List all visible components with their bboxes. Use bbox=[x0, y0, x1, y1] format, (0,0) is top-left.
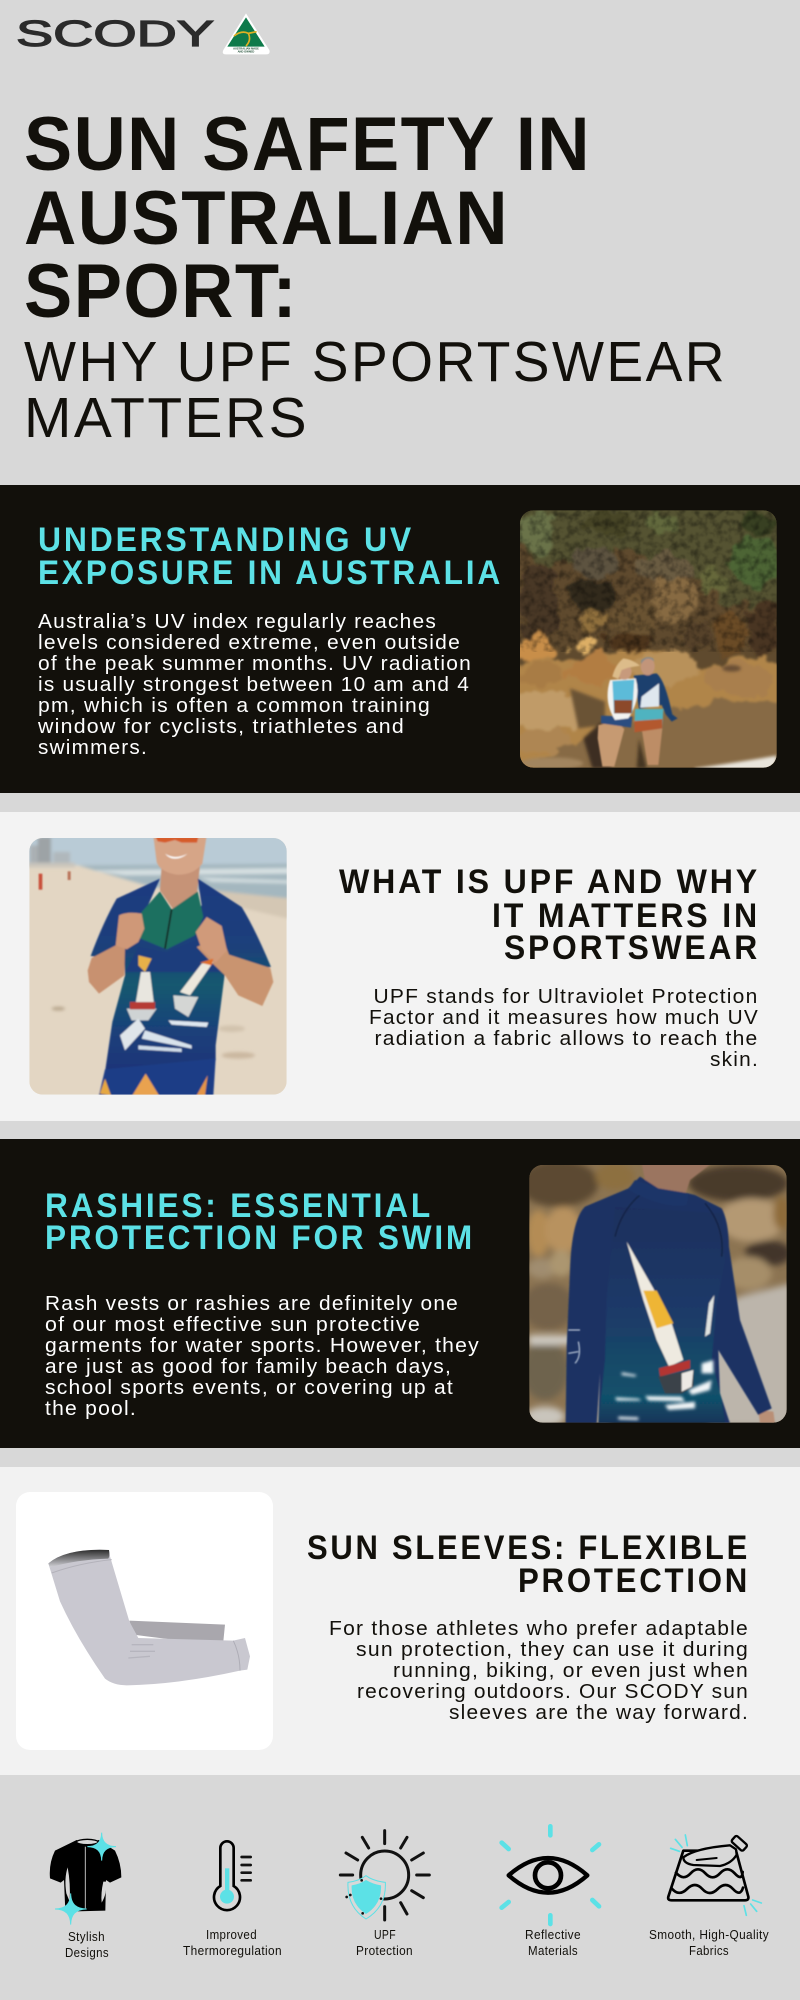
photo: navy rash vest bbox=[518, 1160, 792, 1427]
photo: man in beach shirt bbox=[25, 832, 292, 1095]
text block: UV body copy: window for cyclists, triathletes and bbox=[37, 715, 405, 738]
feature: smooth fabrics bbox=[649, 1835, 769, 1958]
panel: feature icons bbox=[50, 1826, 769, 1960]
icon: Australian Made kite badge: AND OWNED bbox=[238, 49, 254, 53]
caption: reflective materials: Materials bbox=[528, 1944, 578, 1958]
text block: rashies body copy bbox=[45, 1292, 480, 1420]
text block: UV body copy: Australia’s UV index regularly reaches bbox=[38, 610, 437, 633]
heading: sun sleeves: SUN SLEEVES: FLEXIBLE bbox=[307, 1529, 750, 1567]
text block: UPF body copy: Factor and it measures how much UV bbox=[369, 1006, 759, 1029]
icon: Australian Made kite badge: AUSTRALIAN MADE bbox=[233, 46, 259, 50]
title: SUN SAFETY IN bbox=[24, 102, 591, 187]
text block: rashies body copy: Rash vests or rashies are definitely one bbox=[45, 1292, 459, 1315]
caption: reflective materials: Reflective bbox=[525, 1928, 581, 1942]
sail art bbox=[138, 955, 152, 972]
text block: UPF body copy: skin. bbox=[710, 1048, 759, 1071]
neck and head bbox=[160, 865, 200, 912]
panel: sun sleeves bbox=[0, 1467, 800, 1775]
heading: rashies: RASHIES: ESSENTIAL bbox=[45, 1187, 433, 1225]
photo: white sun sleeve bbox=[16, 1492, 273, 1750]
sail bbox=[627, 1242, 683, 1367]
woman torso bbox=[608, 678, 638, 720]
text block: rashies body copy: garments for water sports. However, they bbox=[45, 1334, 480, 1357]
text block: sun sleeves body copy: running, biking, or even just when bbox=[393, 1659, 749, 1682]
vest body and sleeves bbox=[566, 1177, 772, 1423]
text block: sun sleeves body copy: sun protection, they can use it during bbox=[356, 1638, 749, 1661]
subtitle bbox=[24, 330, 727, 450]
text block: UV body copy: swimmers. bbox=[38, 736, 148, 759]
feature: UPF protection bbox=[340, 1831, 429, 1958]
panel: understanding UV exposure bbox=[0, 485, 800, 793]
undershirt bbox=[137, 891, 203, 949]
man torso bbox=[634, 673, 678, 722]
logo header bbox=[16, 13, 270, 54]
text block: rashies body copy: of our most effective sun protective bbox=[45, 1313, 421, 1336]
caption: stylish designs: Designs bbox=[65, 1946, 109, 1960]
caption: UPF protection: Protection bbox=[356, 1944, 413, 1958]
title: SPORT: bbox=[24, 249, 298, 334]
heading: what is UPF: IT MATTERS IN bbox=[492, 897, 760, 935]
text block: UV body copy: of the peak summer months. UV radiation bbox=[38, 652, 472, 675]
heading: rashies: PROTECTION FOR SWIM bbox=[45, 1219, 475, 1257]
caption: stylish designs bbox=[65, 1930, 109, 1960]
caption: reflective materials bbox=[525, 1928, 581, 1958]
feature: stylish designs bbox=[50, 1833, 121, 1960]
right arm bbox=[196, 944, 274, 1006]
text block: sun sleeves body copy: For those athletes who prefer adaptable bbox=[329, 1617, 749, 1640]
caption: smooth high-quality fabrics: Smooth, High-Quality bbox=[649, 1928, 769, 1942]
subtitle: WHY UPF SPORTSWEAR bbox=[24, 330, 727, 394]
heading: rashies bbox=[45, 1187, 475, 1257]
caption: improved thermoregulation: Improved bbox=[206, 1928, 257, 1942]
panel: rashies bbox=[0, 1139, 800, 1448]
shirt bbox=[91, 879, 271, 1072]
text block: sun sleeves body copy: sleeves are the way forward. bbox=[449, 1701, 749, 1724]
text block: UPF body copy: radiation a fabric allows to reach the bbox=[374, 1027, 758, 1050]
shorts bbox=[99, 1059, 216, 1095]
icon: hand on fabric bbox=[668, 1835, 761, 1915]
legs bbox=[598, 722, 624, 767]
caption: smooth high-quality fabrics: Fabrics bbox=[689, 1944, 729, 1958]
title bbox=[24, 102, 591, 334]
heading: sun sleeves bbox=[307, 1529, 750, 1600]
text block: UV body copy: is usually strongest between 10 am and 4 bbox=[38, 673, 470, 696]
icon: thermometer bbox=[214, 1841, 251, 1910]
photo: couple on rocks bbox=[520, 510, 777, 768]
icon: Australian Made kite badge bbox=[223, 13, 270, 54]
heading: what is UPF: WHAT IS UPF AND WHY bbox=[339, 863, 760, 901]
text block: sun sleeves body copy: recovering outdoors. Our SCODY sun bbox=[357, 1680, 749, 1703]
text block: UPF body copy: UPF stands for Ultraviolet Protection bbox=[374, 985, 758, 1008]
left arm bbox=[88, 945, 125, 994]
text block: UV body copy bbox=[37, 610, 472, 759]
heading: understanding UV: EXPOSURE IN AUSTRALIA bbox=[38, 554, 503, 592]
icon: eye with rays bbox=[502, 1826, 599, 1924]
caption: stylish designs: Stylish bbox=[68, 1930, 105, 1944]
heading: understanding UV: UNDERSTANDING UV bbox=[38, 521, 414, 559]
logo: SCODY wordmark: SCODY bbox=[16, 13, 214, 54]
icon: sun with shield bbox=[340, 1831, 429, 1920]
caption: UPF protection: UPF bbox=[374, 1928, 396, 1942]
text block: rashies body copy: school sports events, or covering up at bbox=[45, 1376, 454, 1399]
crew and boat bbox=[659, 1360, 690, 1377]
feature: reflective materials bbox=[502, 1826, 599, 1958]
title: AUSTRALIAN bbox=[24, 176, 509, 261]
caption: improved thermoregulation: Thermoregulation bbox=[183, 1944, 282, 1958]
feature: thermoregulation bbox=[183, 1841, 282, 1958]
heading: what is UPF: SPORTSWEAR bbox=[504, 929, 760, 967]
caption: smooth high-quality fabrics bbox=[649, 1928, 769, 1958]
heading: sun sleeves: PROTECTION bbox=[518, 1562, 750, 1600]
heading: understanding UV bbox=[38, 521, 503, 592]
caption: improved thermoregulation bbox=[183, 1928, 282, 1958]
icon: jersey with sparkles bbox=[50, 1833, 121, 1925]
panel: what is UPF bbox=[0, 812, 800, 1121]
water streaks bbox=[615, 1360, 713, 1420]
text block: UV body copy: levels considered extreme, even outside bbox=[38, 631, 461, 654]
text block: rashies body copy: the pool. bbox=[45, 1397, 137, 1420]
text block: sun sleeves body copy bbox=[329, 1617, 749, 1724]
heading: what is UPF bbox=[339, 863, 760, 967]
shorts bbox=[601, 716, 632, 728]
text block: rashies body copy: are just as good for family beach days, bbox=[45, 1355, 452, 1378]
subtitle: MATTERS bbox=[24, 386, 309, 450]
text block: UPF body copy bbox=[369, 985, 759, 1071]
text block: UV body copy: pm, which is often a common training bbox=[38, 694, 431, 717]
caption: UPF protection bbox=[356, 1928, 413, 1958]
neck bbox=[642, 1165, 710, 1194]
